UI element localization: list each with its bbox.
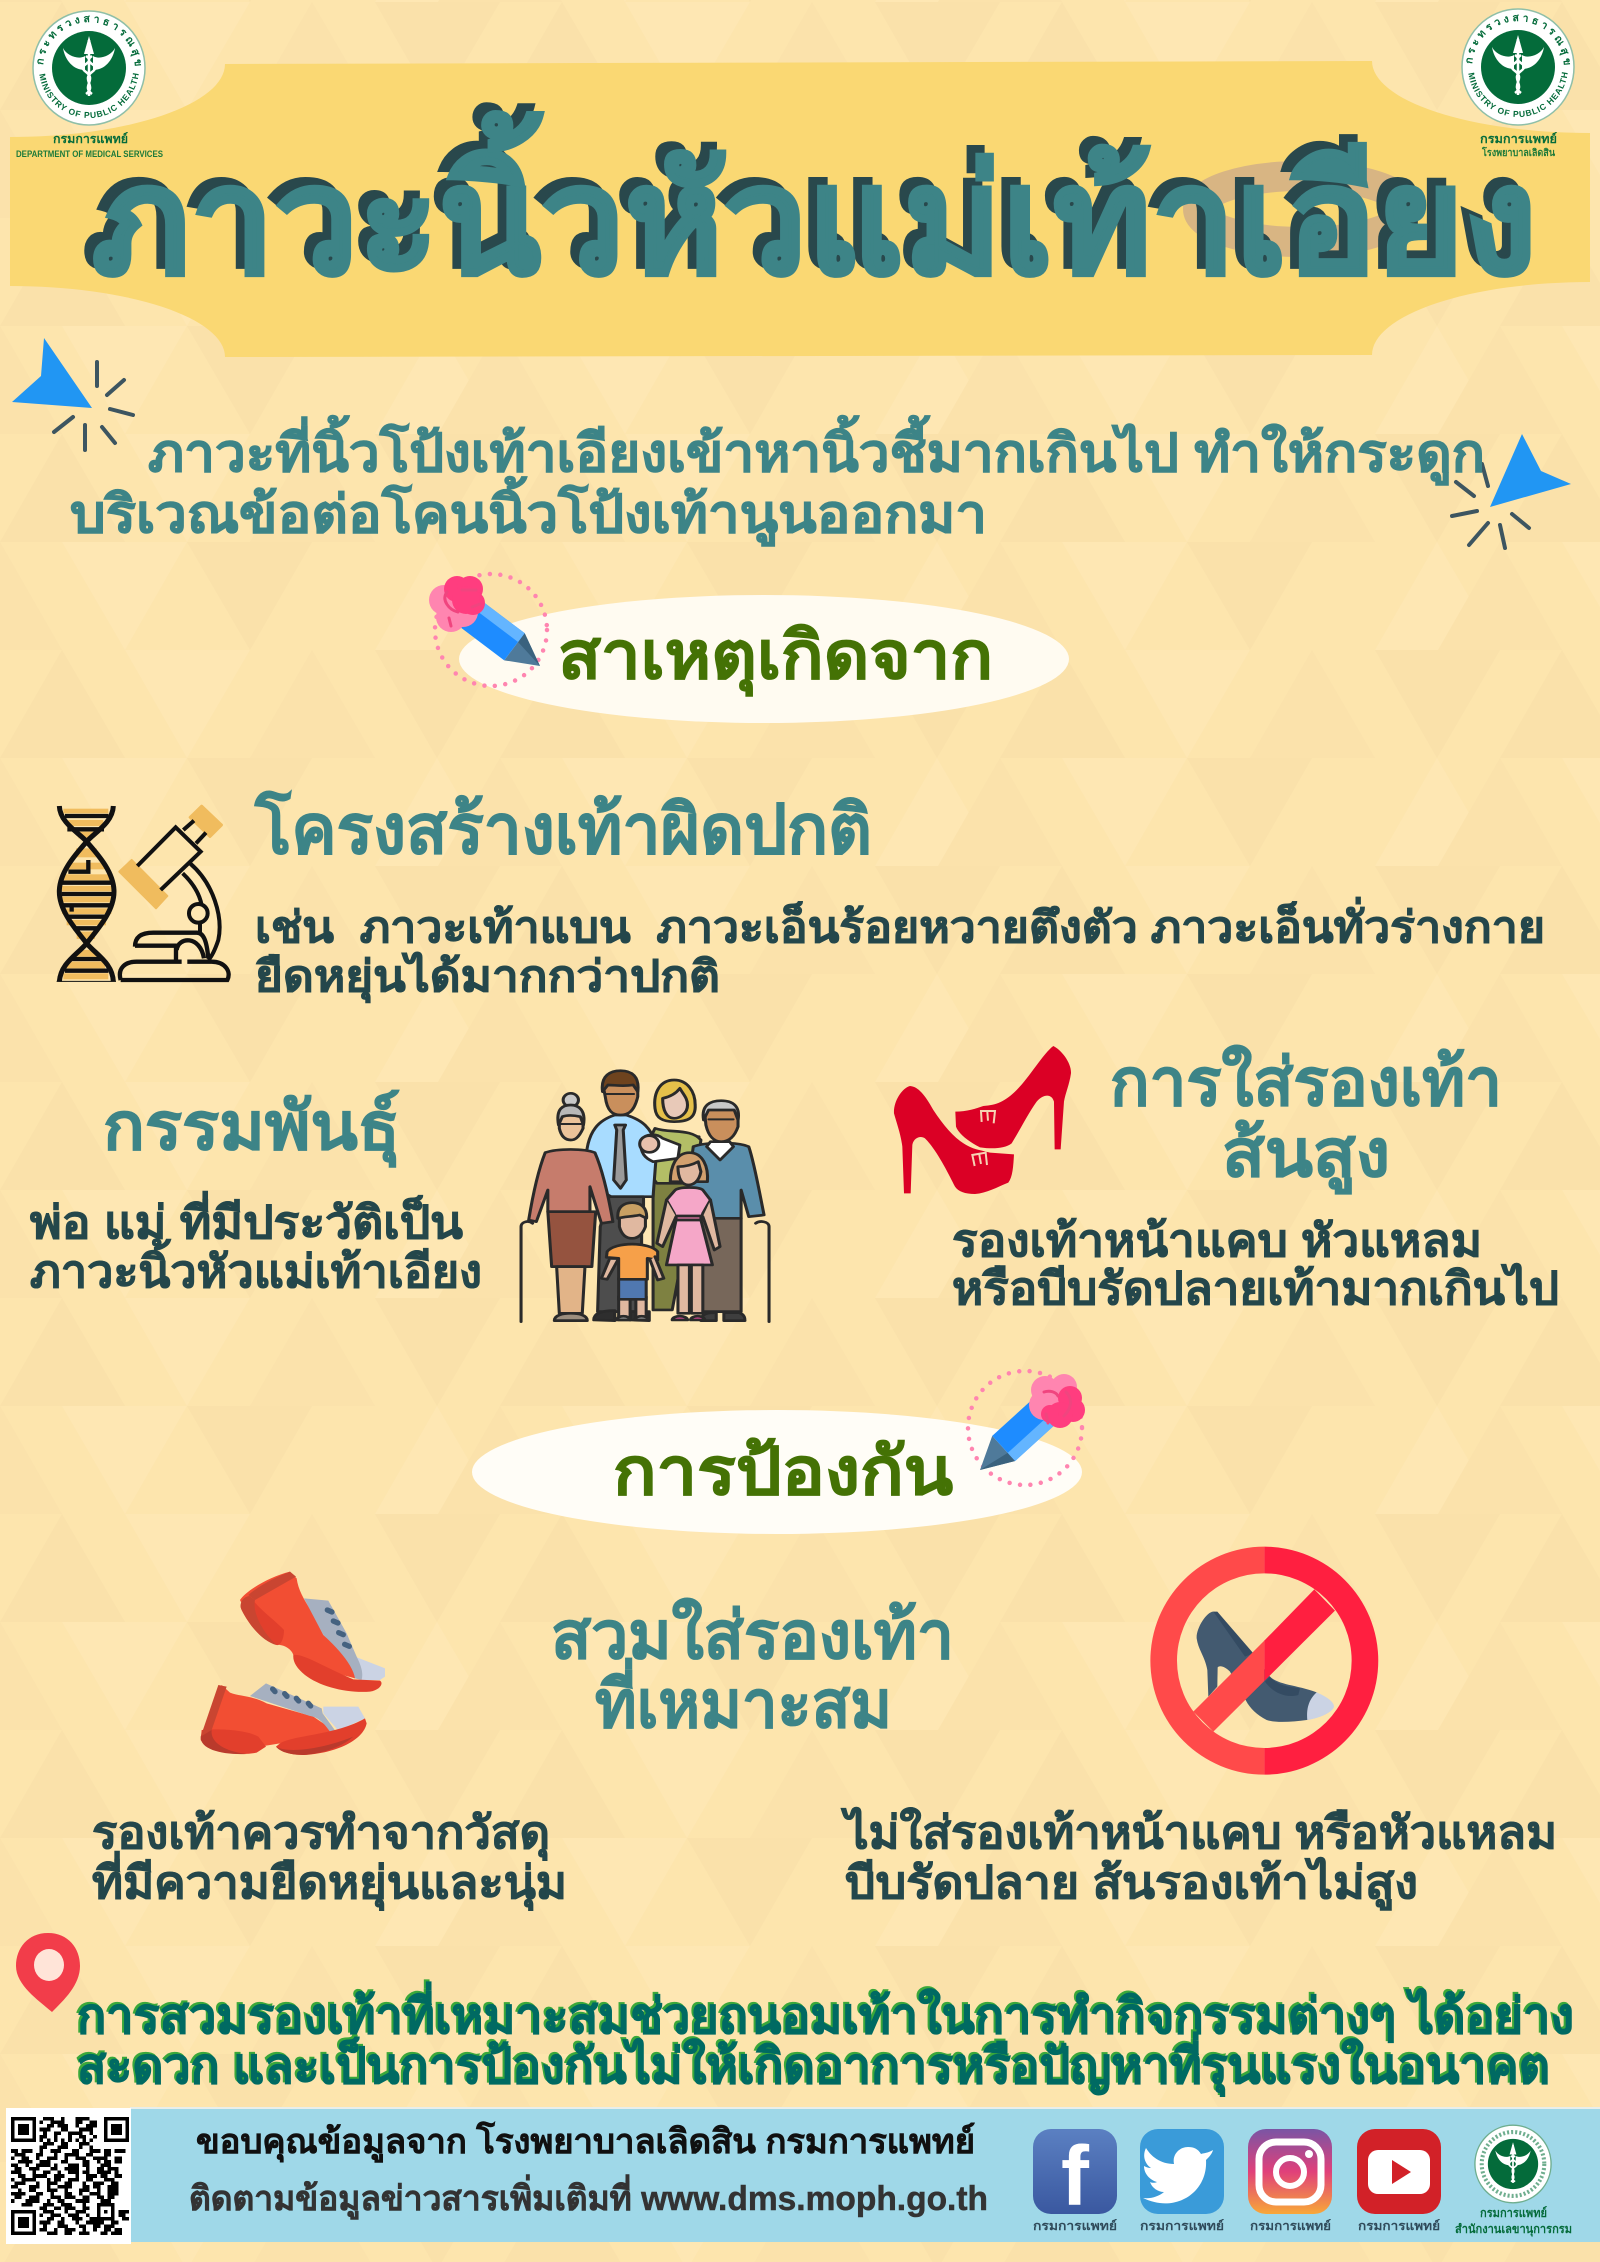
icon: instagram: กรมการแพทย์ xyxy=(1250,2219,1331,2233)
prevention heading: suitable shoes: สวมใส่รองเท้า xyxy=(551,1596,954,1672)
intro paragraph: บริเวณข้อต่อโคนนิ้วโป้งเท้านูนออกมา xyxy=(70,476,987,547)
icon: instagram xyxy=(1248,2129,1332,2233)
logo: ministry left: กระทรวงสาธารณสุข xyxy=(37,16,142,66)
heading: causes: สาเหตุเกิดจาก xyxy=(558,618,993,697)
cause 3: high heels heading: การใส่รองเท้า xyxy=(1110,1043,1502,1119)
footer text: ติดตามข้อมูลข่าวสารเพิ่มเติมที่ www.dms.moph.go.th xyxy=(189,2174,988,2220)
cause 2 text xyxy=(30,1191,482,1297)
logo: ministry right: MINISTRY OF PUBLIC HEALTH xyxy=(1468,72,1568,117)
cause 2 text: พ่อ แม่ ที่มีประวัติเป็น xyxy=(30,1191,463,1248)
logo: footer department: สำนักงานเลขานุการกรม xyxy=(1455,2222,1572,2237)
title: ภาวะนิ้วหัวแม่เท้าเอียง xyxy=(83,103,1528,297)
prevention text left: รองเท้าควรทำจากวัสดุ xyxy=(92,1807,550,1861)
icon: orange sneakers xyxy=(201,1572,385,1755)
icon: pencil and brain prevention xyxy=(968,1371,1085,1485)
icon: dna and microscope xyxy=(57,806,229,982)
conclusion text xyxy=(75,1979,1574,2097)
prevention heading: suitable shoes: ที่เหมาะสม xyxy=(595,1657,892,1741)
icon: youtube xyxy=(1357,2129,1441,2233)
conclusion text: สะดวก และเป็นการป้องกันไม่ให้เกิดอาการหรือปัญหาที่รุนแรงในอนาคต xyxy=(75,2029,1548,2095)
icon: youtube: กรมการแพทย์ xyxy=(1358,2219,1440,2233)
intro paragraph: ภาวะที่นิ้วโป้งเท้าเอียงเข้าหานิ้วชี้มากเกินไป ทำให้กระดูก xyxy=(148,415,1485,486)
icon: no high heels sign xyxy=(1150,1547,1378,1775)
prevention heading oval xyxy=(472,1410,1082,1534)
footer bar xyxy=(130,2107,1600,2242)
cause 3: high heels heading xyxy=(1110,1043,1502,1195)
logo caption right: โรงพยาบาลเลิดสิน xyxy=(1481,146,1555,159)
logo caption right: กรมการแพทย์ xyxy=(1480,132,1557,146)
prevention text right: ไม่ใส่รองเท้าหน้าแคบ หรือหัวแหลม xyxy=(841,1806,1557,1858)
icon: pencil and brain causes xyxy=(429,574,550,686)
prevention text right: บีบรัดปลาย ส้นรองเท้าไม่สูง xyxy=(845,1856,1418,1911)
icon: family xyxy=(521,1071,769,1322)
prevention text right xyxy=(841,1806,1557,1911)
causes heading oval xyxy=(459,595,1069,723)
icon: twitter: กรมการแพทย์ xyxy=(1140,2219,1224,2233)
logo: ministry right: กระทรวงสาธารณสุข xyxy=(1466,14,1570,65)
prevention text left xyxy=(92,1807,567,1911)
logo: ministry left: MINISTRY OF PUBLIC HEALTH xyxy=(39,73,139,118)
cause 3 text xyxy=(952,1215,1559,1314)
cause 3 text: หรือบีบรัดปลายเท้ามากเกินไป xyxy=(952,1262,1559,1314)
cause 2: heredity heading: กรรมพันธุ์ xyxy=(103,1089,400,1168)
logo caption left: DEPARTMENT OF MEDICAL SERVICES xyxy=(16,149,163,159)
cause 3 text: รองเท้าหน้าแคบ หัวแหลม xyxy=(952,1215,1482,1266)
conclusion text: การสวมรองเท้าที่เหมาะสมช่วยถนอมเท้าในการทำกิจกรรมต่างๆ ได้อย่าง xyxy=(77,1981,1574,2044)
intro paragraph xyxy=(70,415,1485,547)
logo: footer department: กรมการแพทย์ xyxy=(1480,2206,1547,2220)
logo caption left: กรมการแพทย์ xyxy=(53,132,128,146)
cause 1 text: ยืดหยุ่นได้มากกว่าปกติ xyxy=(255,951,720,1004)
prevention heading: suitable shoes xyxy=(551,1596,954,1741)
logo: ministry right xyxy=(1461,8,1575,126)
footer text xyxy=(189,2121,988,2220)
qr code xyxy=(6,2108,131,2244)
cause 1: foot structure heading: โครงสร้างเท้าผิดปกติ xyxy=(254,790,872,868)
cause 3: high heels heading: ส้นสูง xyxy=(1222,1116,1390,1195)
title: ภาวะนิ้วหัวแม่เท้าเอียง xyxy=(92,111,1537,305)
icon: twitter xyxy=(1140,2129,1224,2233)
cause 1 text xyxy=(255,897,1545,1004)
logo: footer department xyxy=(1455,2125,1572,2237)
prevention text left: ที่มีความยืดหยุ่นและนุ่ม xyxy=(92,1851,567,1911)
conclusion text: การสวมรองเท้าที่เหมาะสมช่วยถนอมเท้าในการทำกิจกรรมต่างๆ ได้อย่าง xyxy=(75,1979,1572,2042)
logo caption left xyxy=(16,132,163,159)
cause 2 text: ภาวะนิ้วหัวแม่เท้าเอียง xyxy=(30,1238,482,1297)
heading: prevention: การป้องกัน xyxy=(613,1434,953,1508)
icon: facebook: กรมการแพทย์ xyxy=(1033,2219,1117,2233)
icon: facebook xyxy=(1033,2129,1117,2233)
icon: facebook: f xyxy=(1061,2129,1090,2223)
conclusion text: สะดวก และเป็นการป้องกันไม่ให้เกิดอาการหรือปัญหาที่รุนแรงในอนาคต xyxy=(77,2031,1550,2097)
icon: cursor arrow left xyxy=(12,338,133,450)
title banner xyxy=(10,61,1590,357)
logo: ministry left xyxy=(32,10,146,126)
footer text: ขอบคุณข้อมูลจาก โรงพยาบาลเลิดสิน กรมการแพทย์ xyxy=(196,2121,975,2163)
icon: cursor arrow right xyxy=(1452,434,1571,548)
icon: red high heels xyxy=(894,1046,1071,1194)
icon: location pin xyxy=(16,1933,80,2012)
logo caption right xyxy=(1480,132,1557,159)
cause 1 text: เช่น ภาวะเท้าแบน ภาวะเอ็นร้อยหวายตึงตัว ภาวะเอ็นทั่วร่างกาย xyxy=(255,897,1545,952)
